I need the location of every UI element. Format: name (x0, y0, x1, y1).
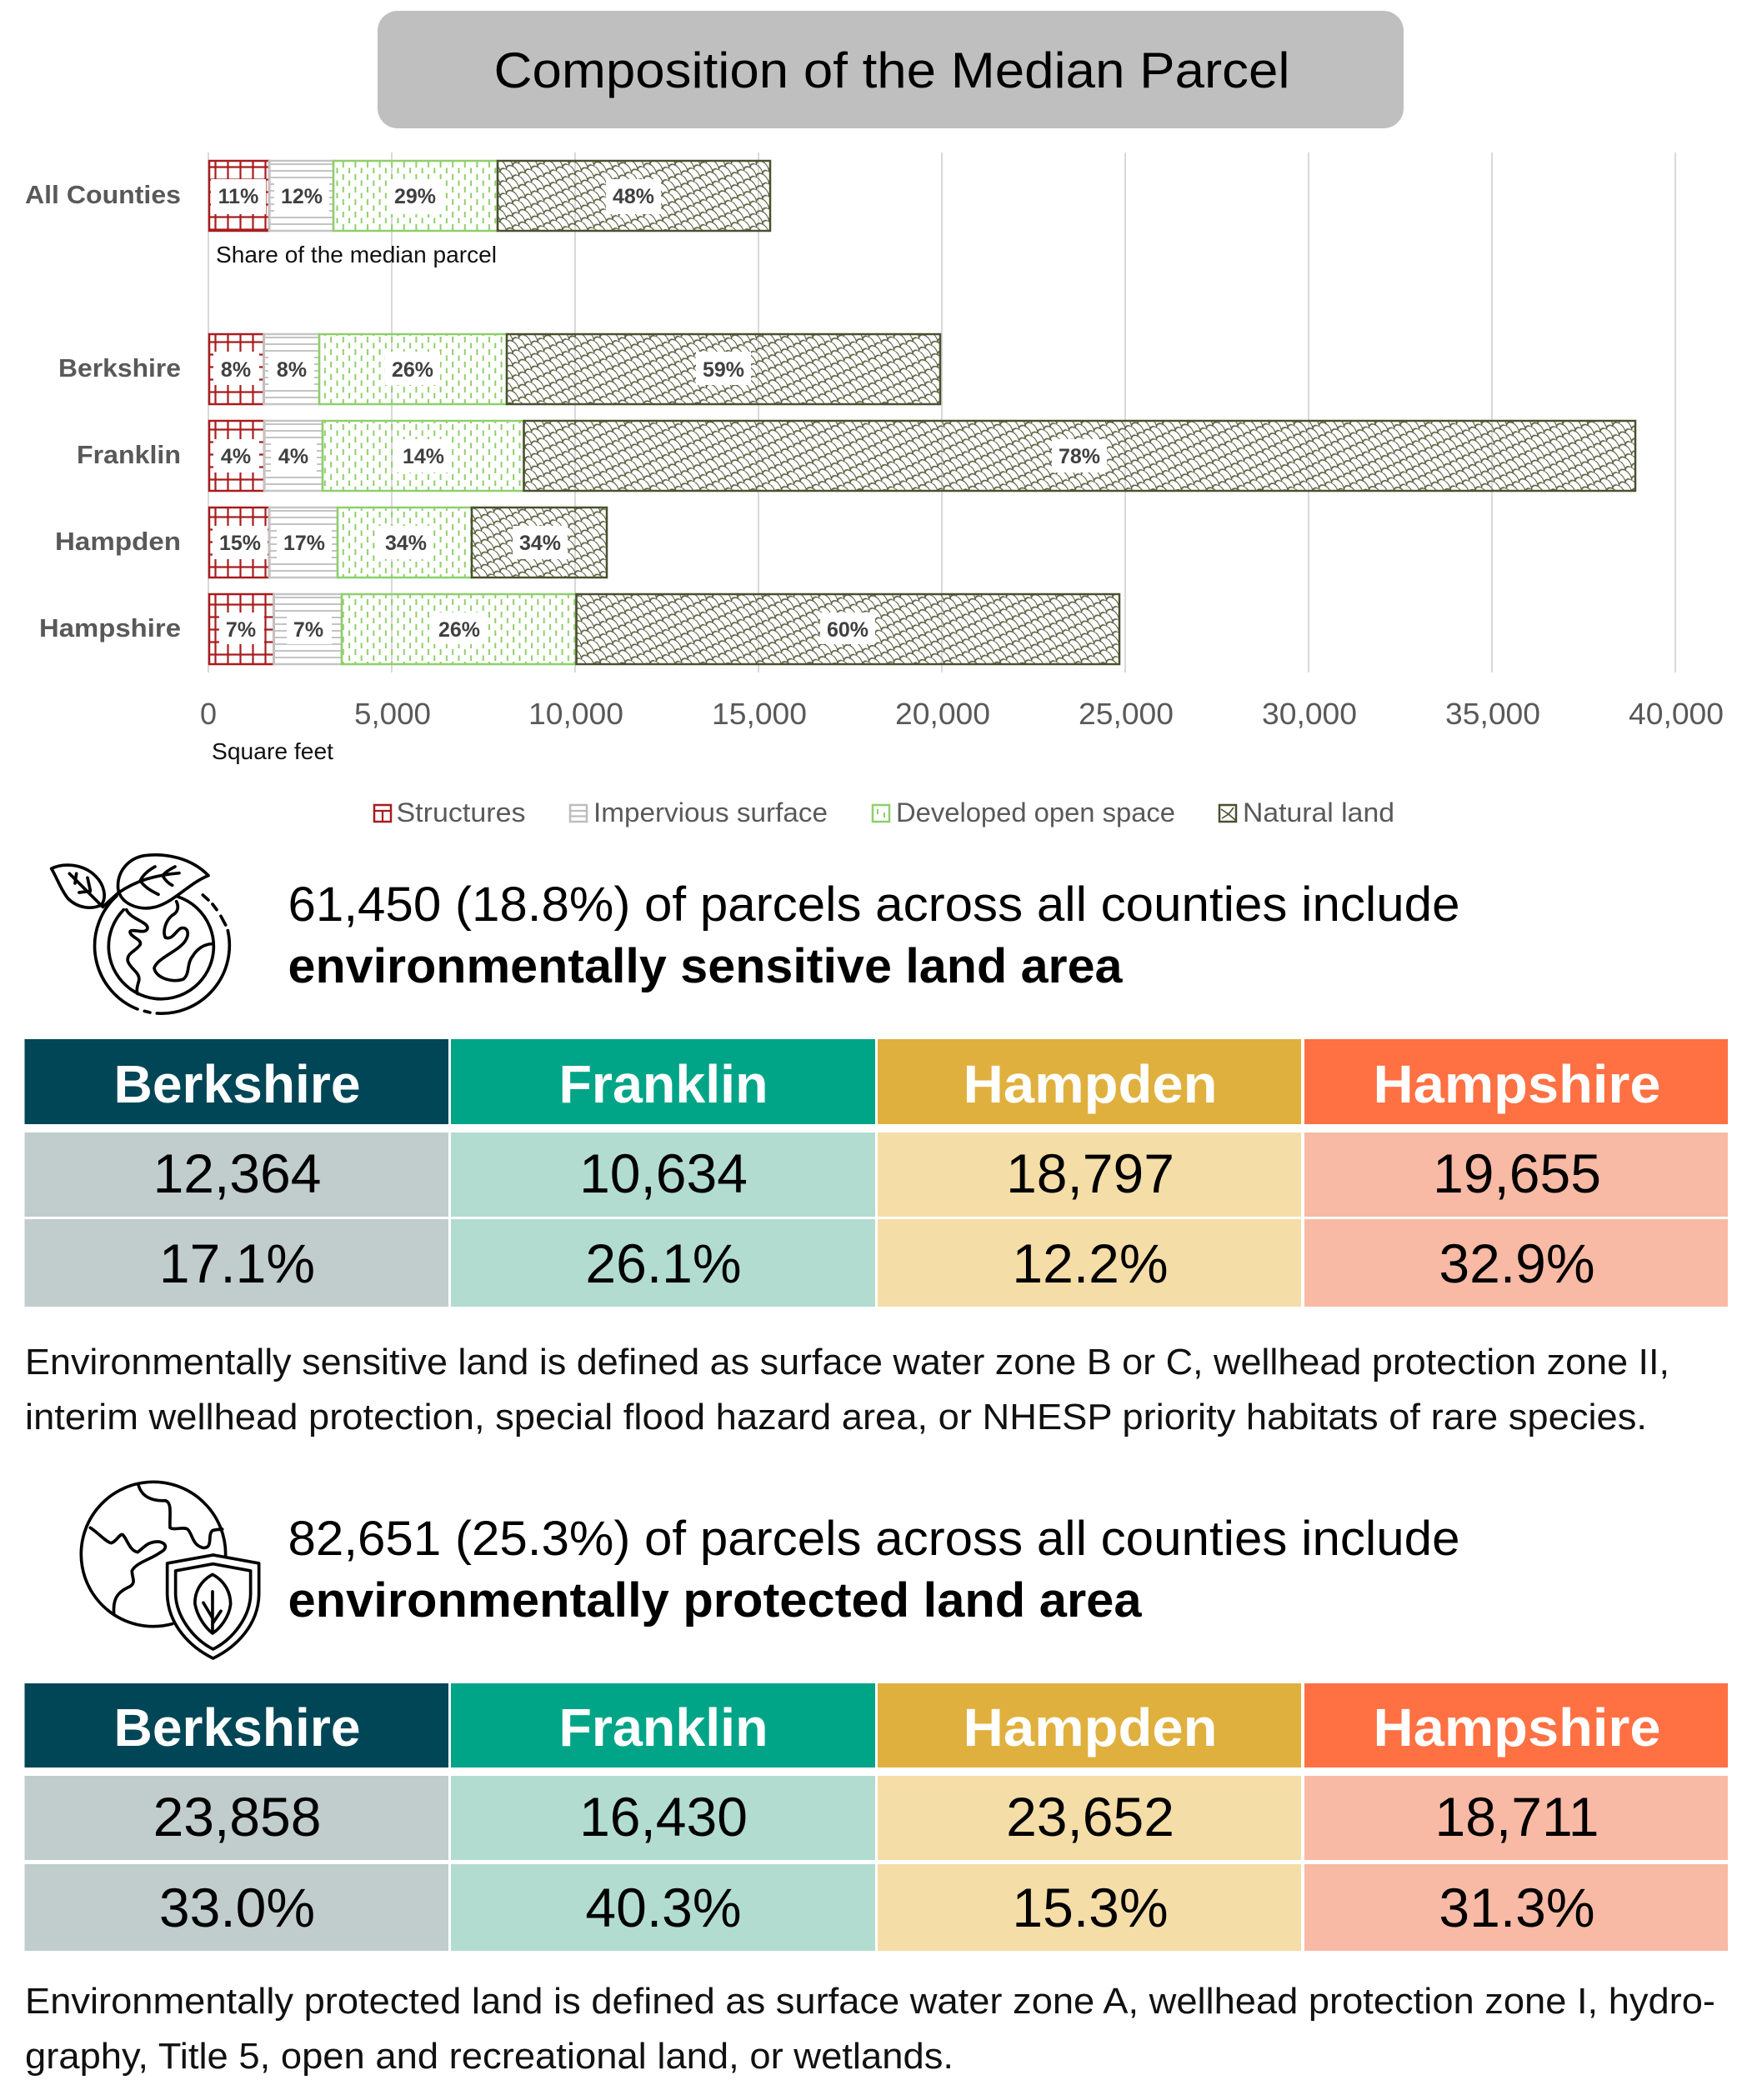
axis note: share of the median parcel: Share of the median parcel (216, 242, 497, 268)
definition: environmentally sensitive land: Environmentally sensitive land is defined as surface water zone B or C, wellhead protection zone II, (25, 1342, 1669, 1382)
table: protected land by county: Hampden (964, 1698, 1217, 1758)
legend (374, 798, 1394, 828)
icon: globe with leaves (52, 855, 229, 1013)
table: sensitive land by county: 32.9% (1439, 1232, 1595, 1294)
bar: All Counties: All Counties (25, 180, 181, 209)
title banner: Composition of the Median Parcel (493, 42, 1290, 98)
definition: environmentally protected land: Environmentally protected land is defined as surface water zone A, wellhead protection zone I, hydro- (25, 1981, 1715, 2022)
definition: environmentally protected land (25, 1981, 1715, 2077)
table: protected land by county: Franklin (558, 1698, 768, 1758)
table: sensitive land by county: Berkshire (113, 1054, 360, 1114)
bar: All Counties: 11% (218, 185, 258, 208)
table: protected land by county: 23,652 (1006, 1786, 1174, 1848)
bar: Franklin (77, 421, 1635, 491)
table: protected land by county: 16,430 (579, 1786, 748, 1848)
bar: Hampden: 17% (283, 532, 325, 555)
bar: Hampshire: 26% (438, 618, 480, 642)
stacked bar chart (25, 152, 1724, 764)
bar: Berkshire: 59% (703, 358, 744, 382)
table: sensitive land by county: Hampshire (1374, 1054, 1660, 1114)
x axis labels: 5,000 (354, 697, 431, 731)
heading: environmentally sensitive land (288, 878, 1460, 993)
bar: All Counties: 29% (394, 185, 436, 208)
bar: All Counties: 12% (281, 185, 323, 208)
bar: Berkshire: 8% (221, 358, 251, 382)
x axis labels: 40,000 (1629, 697, 1724, 731)
x axis labels: 30,000 (1262, 697, 1357, 731)
table: sensitive land by county: Franklin (558, 1054, 768, 1114)
table: protected land by county: 40.3% (585, 1877, 742, 1938)
x axis labels: 35,000 (1445, 697, 1540, 731)
table: sensitive land by county: 26.1% (585, 1232, 742, 1294)
x axis labels: 25,000 (1079, 697, 1174, 731)
table: sensitive land by county: 12.2% (1012, 1232, 1169, 1294)
bar: Hampden (55, 508, 607, 578)
bar: Berkshire: 8% (277, 358, 307, 382)
bar: Franklin: Franklin (77, 440, 181, 469)
definition: environmentally sensitive land (25, 1342, 1669, 1438)
x axis labels: 0 (200, 697, 217, 731)
title banner (378, 11, 1404, 128)
bar: Franklin: 4% (221, 445, 251, 468)
table: protected land by county: 33.0% (159, 1877, 315, 1938)
table: sensitive land by county: 19,655 (1433, 1142, 1601, 1204)
bar: Hampden: 15% (219, 532, 261, 555)
bar: Hampden: 34% (385, 532, 427, 555)
heading: environmentally protected land (288, 1512, 1460, 1628)
x axis labels: 15,000 (712, 697, 807, 731)
x axis labels (200, 697, 1724, 731)
bar: Hampshire: Hampshire (39, 613, 181, 642)
bar: Berkshire: Berkshire (58, 353, 181, 382)
table: sensitive land by county: 17.1% (159, 1232, 315, 1294)
legend: Structures (397, 798, 525, 828)
bar: Hampshire: 7% (293, 618, 323, 642)
icon: globe with shield (81, 1482, 259, 1658)
legend: Impervious surface (593, 798, 828, 828)
table: protected land by county: 31.3% (1439, 1877, 1595, 1938)
table: sensitive land by county: Hampden (964, 1054, 1217, 1114)
table: protected land by county (25, 1683, 1728, 1951)
bar: Hampshire: 7% (226, 618, 256, 642)
bar: Franklin: 4% (278, 445, 308, 468)
table: sensitive land by county: 10,634 (579, 1142, 748, 1204)
bar: Franklin: 14% (403, 445, 444, 468)
bar: Hampden: 34% (519, 532, 561, 555)
bar: Franklin: 78% (1059, 445, 1100, 468)
bar: All Counties: 48% (613, 185, 654, 208)
table: protected land by county: Berkshire (113, 1698, 360, 1758)
table: protected land by county: 23,858 (153, 1786, 321, 1848)
table: protected land by county: 15.3% (1012, 1877, 1169, 1938)
bar: Hampshire: 60% (827, 618, 868, 642)
table: protected land by county: Hampshire (1374, 1698, 1660, 1758)
heading: environmentally protected land: 82,651 (25.3%) of parcels across all counties include (288, 1512, 1460, 1566)
table: sensitive land by county (25, 1039, 1728, 1307)
definition: environmentally protected land: graphy, Title 5, open and recreational land, or wetlands. (25, 2036, 954, 2077)
table: protected land by county: 18,711 (1435, 1786, 1599, 1848)
definition: environmentally sensitive land: interim wellhead protection, special flood hazard area, or NHESP priority habitats of rare species. (25, 1397, 1647, 1438)
x axis labels: 10,000 (528, 697, 623, 731)
bar: All Counties (25, 161, 770, 231)
heading: environmentally protected land: environmentally protected land area (288, 1573, 1142, 1628)
table: sensitive land by county: 12,364 (153, 1142, 321, 1204)
legend: Natural land (1243, 798, 1394, 828)
heading: environmentally sensitive land: 61,450 (18.8%) of parcels across all counties include (288, 878, 1460, 932)
bar: Berkshire: 26% (392, 358, 433, 382)
heading: environmentally sensitive land: environmentally sensitive land area (288, 939, 1123, 993)
bar: Hampden: Hampden (55, 527, 181, 556)
bar: Hampshire (39, 594, 1119, 664)
axis note: square feet: Square feet (212, 738, 333, 764)
x axis labels: 20,000 (895, 697, 990, 731)
table: sensitive land by county: 18,797 (1006, 1142, 1174, 1204)
legend: Developed open space (896, 798, 1175, 828)
bar: Berkshire (58, 334, 940, 404)
